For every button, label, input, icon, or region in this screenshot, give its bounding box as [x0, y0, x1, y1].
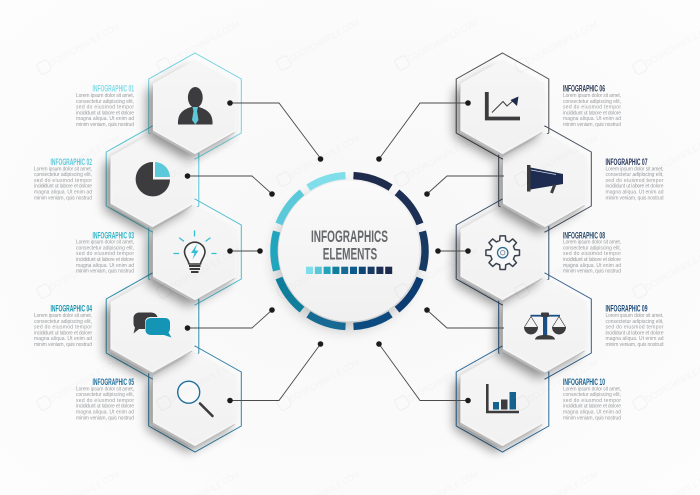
text block: infographic 04: minim veniam, quis nostrud [34, 342, 92, 348]
icon: bar chart [487, 384, 519, 412]
text block: infographic 08: Lorem ipsum dolor sit amet, [563, 240, 621, 246]
text block: infographic 06: sed do eiusmod tempor [563, 105, 621, 111]
text block: infographic 07: magna aliqua. Ut enim ad [606, 190, 664, 196]
text block: infographic 07: minim veniam, quis nostrud [606, 195, 664, 201]
watermark pattern: DOORCHINFILE.COM [48, 21, 121, 68]
outline: hexagon 2 [106, 126, 199, 232]
watermark pattern: DOORCHINFILE.COM [406, 357, 479, 404]
watermark pattern: DOORCHINFILE.COM [288, 245, 361, 292]
text block: infographic 03: INFOGRAPHIC 03 [92, 230, 134, 240]
watermark pattern: DOORCHINFILE.COM [406, 245, 479, 292]
watermark pattern: DOORCHINFILE.COM [406, 133, 479, 180]
text block: infographic 05: consectetur adipiscing elit, [76, 392, 134, 398]
text block: infographic 04: incididunt ut labore et dolore [34, 330, 92, 336]
text block: infographic 07: Lorem ipsum dolor sit amet, [606, 166, 664, 172]
text block: infographic 08: incididunt ut labore et dolore [563, 257, 621, 263]
text block: infographic 09: incididunt ut labore et dolore [606, 330, 664, 336]
outline: hexagon 8 [456, 199, 549, 305]
text block: infographic 04: INFOGRAPHIC 04 [50, 304, 92, 314]
watermark pattern: DOORCHINFILE.COM [48, 357, 121, 404]
connector 3 [227, 248, 263, 254]
text block: infographic 03: Lorem ipsum dolor sit amet, [76, 240, 134, 246]
icon: gear [486, 236, 519, 269]
text block: infographic 05 [76, 377, 134, 421]
text block: infographic 01: sed do eiusmod tempor [76, 105, 134, 111]
watermark pattern: DOORCHINFILE.COM [168, 19, 241, 66]
text block: infographic 04: magna aliqua. Ut enim ad [34, 336, 92, 342]
text block: infographic 02 [34, 157, 92, 201]
text block: infographic 08 [563, 230, 621, 275]
text block: infographic 03: incididunt ut labore et dolore [76, 257, 134, 263]
text block: infographic 01: minim veniam, quis nostrud [76, 122, 134, 128]
text block: infographic 01: incididunt ut labore et dolore [76, 110, 134, 116]
text block: infographic 09: Lorem ipsum dolor sit amet, [606, 313, 664, 319]
text block: infographic 05: INFOGRAPHIC 05 [92, 377, 134, 387]
connector 4 [185, 307, 275, 331]
text block: infographic 08: consectetur adipiscing elit, [563, 245, 621, 251]
text block: infographic 06: magna aliqua. Ut enim ad [563, 116, 621, 122]
text block: infographic 10: sed do eiusmod tempor [563, 398, 621, 404]
text block: infographic 01 [76, 84, 134, 128]
text block: infographic 02: Lorem ipsum dolor sit amet, [34, 166, 92, 172]
text block: infographic 07: incididunt ut labore et dolore [606, 184, 664, 190]
icon: businessman [178, 87, 213, 124]
text block: infographic 06: Lorem ipsum dolor sit amet, [563, 93, 621, 99]
text block: infographic 06: incididunt ut labore et dolore [563, 110, 621, 116]
hexagon tile 3 [147, 207, 236, 306]
text block: infographic 10: consectetur adipiscing elit, [563, 392, 621, 398]
text block: infographic 08: magna aliqua. Ut enim ad [563, 263, 621, 269]
outline: hexagon 9 [499, 273, 591, 379]
watermark pattern: DOORCHINFILE.COM [288, 133, 361, 180]
hexagon tile 4 [104, 280, 194, 378]
text block: infographic 10: INFOGRAPHIC 10 [563, 377, 605, 387]
text block: infographic 02: INFOGRAPHIC 02 [50, 157, 92, 167]
text block: infographic 03: consectetur adipiscing elit, [76, 245, 134, 251]
text block: infographic 03 [76, 230, 134, 275]
outline: hexagon 10 [456, 346, 549, 452]
watermark pattern: DOORCHINFILE.COM [168, 357, 241, 404]
text block: infographic 09: INFOGRAPHIC 09 [606, 304, 648, 314]
text block: infographic 02: incididunt ut labore et dolore [34, 184, 92, 190]
center title: ELEMENTS [323, 246, 377, 264]
hexagon tile 2 [104, 134, 194, 233]
colour key squares [306, 267, 392, 274]
text block: infographic 01: INFOGRAPHIC 01 [92, 84, 134, 94]
text block: infographic 05: magna aliqua. Ut enim ad [76, 409, 134, 415]
text block: infographic 10: minim veniam, quis nostrud [563, 415, 621, 421]
text block: infographic 10: Lorem ipsum dolor sit amet, [563, 386, 621, 392]
watermark pattern: DOORCHINFILE.COM [526, 133, 599, 180]
hexagon tile 8 [454, 207, 544, 306]
text block: infographic 06: consectetur adipiscing elit, [563, 99, 621, 105]
text block: infographic 10 [563, 377, 621, 421]
icon: light bulb [174, 231, 216, 273]
text block: infographic 04: sed do eiusmod tempor [34, 325, 92, 331]
text block: infographic 08: INFOGRAPHIC 08 [563, 230, 605, 240]
text block: infographic 02: magna aliqua. Ut enim ad [34, 190, 92, 196]
connector 9 [424, 307, 504, 328]
connector 8 [435, 248, 471, 254]
icon: line chart [487, 92, 520, 118]
text block: infographic 02: consectetur adipiscing elit, [34, 172, 92, 178]
text block: infographic 02: sed do eiusmod tempor [34, 178, 92, 184]
text block: infographic 03: minim veniam, quis nostrud [76, 269, 134, 275]
text block: infographic 03: sed do eiusmod tempor [76, 251, 134, 257]
watermark pattern: DOORCHINFILE.COM [526, 357, 599, 404]
watermark pattern: DOORCHINFILE.COM [288, 17, 361, 64]
center title: INFOGRAPHICS [311, 228, 388, 246]
watermark pattern: DOORCHINFILE.COM [48, 133, 121, 180]
outline: hexagon 3 [149, 199, 241, 305]
connector 2 [185, 173, 275, 197]
hexagon tile 1 [147, 61, 236, 160]
hexagon tile 6 [454, 61, 544, 160]
text block: infographic 09 [606, 304, 664, 348]
text block: infographic 01: consectetur adipiscing elit, [76, 99, 134, 105]
connector 5 [227, 341, 323, 403]
text block: infographic 09: minim veniam, quis nostrud [606, 342, 664, 348]
text block: infographic 05: Lorem ipsum dolor sit amet, [76, 386, 134, 392]
text block: infographic 04 [34, 304, 92, 348]
outline: hexagon 6 [456, 53, 549, 159]
hexagon tile 10 [454, 353, 544, 452]
watermark pattern: DOORCHINFILE.COM [168, 133, 241, 180]
text block: infographic 04: consectetur adipiscing elit, [34, 319, 92, 325]
outline: hexagon 5 [149, 346, 241, 452]
text block: infographic 09: magna aliqua. Ut enim ad [606, 336, 664, 342]
text block: infographic 10: magna aliqua. Ut enim ad [563, 409, 621, 415]
text block: infographic 05: incididunt ut labore et dolore [76, 404, 134, 410]
text block: infographic 07 [606, 157, 664, 201]
icon: magnifier [178, 381, 212, 416]
text block: infographic 09: sed do eiusmod tempor [606, 325, 664, 331]
text block: infographic 04: Lorem ipsum dolor sit amet, [34, 313, 92, 319]
text block: infographic 08: minim veniam, quis nostrud [563, 269, 621, 275]
watermark pattern: DOORCHINFILE.COM [526, 19, 599, 66]
hexagon tile 7 [497, 134, 586, 233]
icon: pie chart [136, 162, 170, 196]
watermark pattern: DOORCHINFILE.COM [168, 245, 241, 292]
outline: hexagon 7 [499, 126, 591, 232]
text block: infographic 07: consectetur adipiscing elit, [606, 172, 664, 178]
watermark pattern: DOORCHINFILE.COM [406, 17, 479, 64]
text block: infographic 10: incididunt ut labore et dolore [563, 404, 621, 410]
connector 7 [424, 176, 504, 197]
icon: chat bubbles [134, 312, 172, 338]
icon: megaphone [527, 165, 563, 193]
text block: infographic 07: INFOGRAPHIC 07 [606, 157, 648, 167]
text block: infographic 01: Lorem ipsum dolor sit amet, [76, 93, 134, 99]
watermark pattern: DOORCHINFILE.COM [288, 357, 361, 404]
text block: infographic 02: minim veniam, quis nostrud [34, 195, 92, 201]
text block: infographic 01: magna aliqua. Ut enim ad [76, 116, 134, 122]
text block: infographic 09: consectetur adipiscing elit, [606, 319, 664, 325]
outline: hexagon 1 [149, 53, 241, 159]
text block: infographic 07: sed do eiusmod tempor [606, 178, 664, 184]
watermark pattern: DOORCHINFILE.COM [48, 245, 121, 292]
text block: infographic 03: magna aliqua. Ut enim ad [76, 263, 134, 269]
text block: infographic 05: sed do eiusmod tempor [76, 398, 134, 404]
connector 6 [376, 100, 471, 162]
icon: balance scales [524, 312, 566, 340]
hexagon tile 5 [147, 353, 236, 452]
watermark pattern: DOORCHINFILE.COM [526, 245, 599, 292]
hexagon tile 9 [497, 280, 586, 378]
connector 10 [376, 341, 471, 403]
text block: infographic 06: INFOGRAPHIC 06 [563, 84, 605, 94]
text block: infographic 05: minim veniam, quis nostrud [76, 415, 134, 421]
text block: infographic 06 [563, 84, 621, 128]
outline: hexagon 4 [106, 273, 199, 379]
center title [311, 228, 388, 264]
center circle with segmented ring [243, 145, 456, 357]
connector 1 [227, 100, 323, 162]
text block: infographic 06: minim veniam, quis nostrud [563, 122, 621, 128]
text block: infographic 08: sed do eiusmod tempor [563, 251, 621, 257]
